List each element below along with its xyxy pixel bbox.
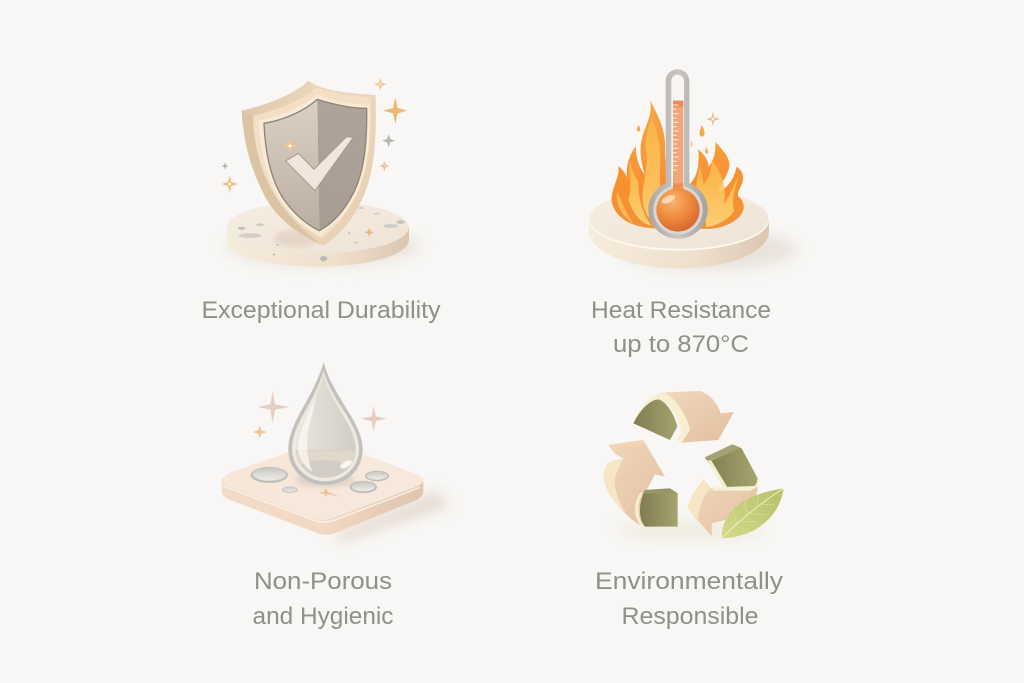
disc platform — [589, 189, 797, 270]
check mark — [286, 137, 353, 191]
leaf — [722, 488, 784, 538]
icon: thermometer in flames on a disc — [589, 69, 797, 270]
heading: Heat Resistance up to 870°C: Heat Resistance — [591, 297, 771, 324]
icon: shield with check on a speckled disc — [221, 78, 420, 267]
left arrow — [604, 440, 678, 527]
heading: Environmentally Responsible: Environmentally — [595, 568, 783, 595]
tile platform — [222, 442, 450, 542]
disc platform — [227, 201, 420, 267]
heading: Exceptional Durability: Exceptional Durability — [202, 297, 440, 324]
flames — [612, 100, 744, 229]
icon: water drop on a square tile — [222, 362, 450, 542]
shield inner face — [264, 99, 367, 231]
heading: Environmentally Responsible: Responsible — [622, 603, 758, 630]
heading: Non-Porous and Hygienic: and Hygienic — [252, 603, 394, 630]
right arrow and olive block — [687, 444, 758, 536]
water drop — [288, 362, 363, 487]
heading: Non-Porous and Hygienic — [252, 568, 394, 630]
shield body — [242, 81, 376, 246]
sparkles around drop — [253, 391, 387, 439]
heading: Heat Resistance up to 870°C — [591, 297, 771, 358]
heading: Non-Porous and Hygienic: Non-Porous — [254, 568, 392, 595]
heading: Environmentally Responsible — [595, 568, 783, 630]
thermometer — [648, 69, 708, 239]
icon: recycling arrows with leaf — [604, 391, 784, 540]
sparkle — [706, 112, 720, 126]
heading: Heat Resistance up to 870°C: up to 870°C — [613, 331, 749, 358]
top arrow — [633, 391, 734, 443]
small puddles — [251, 467, 389, 497]
sparkles around shield — [221, 78, 407, 192]
